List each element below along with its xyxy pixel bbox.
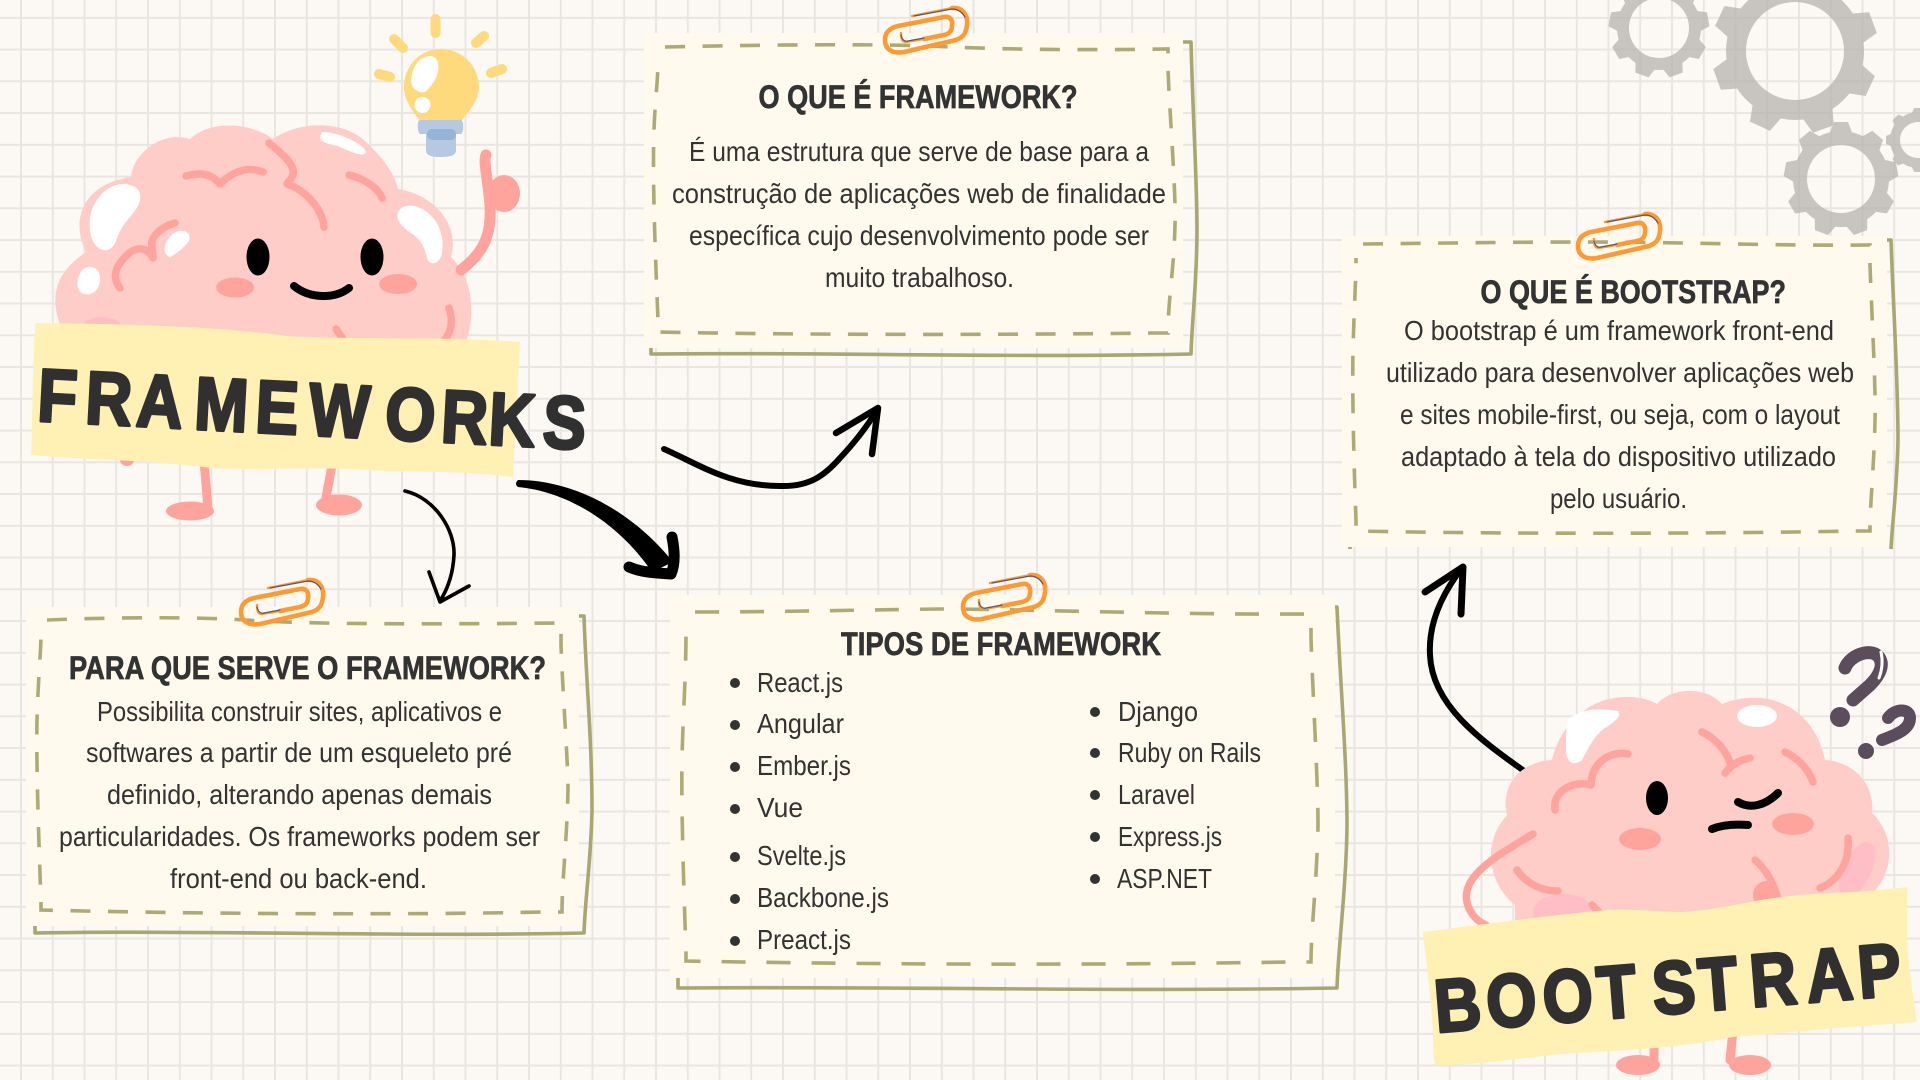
illustration: happy brain xyxy=(55,125,520,520)
text block xyxy=(672,136,1166,293)
list: right column: ASP.NET xyxy=(1117,863,1212,894)
text block: pelo usuário. xyxy=(1550,483,1687,514)
list: left column xyxy=(730,667,889,955)
text block: Possibilita construir sites, aplicativos e xyxy=(97,696,502,727)
list: left column: React.js xyxy=(757,667,843,698)
text block: softwares a partir de um esqueleto pré xyxy=(86,737,512,768)
paperclip xyxy=(1578,214,1660,258)
text block: front-end ou back-end. xyxy=(170,863,427,894)
text block: muito trabalhoso. xyxy=(825,262,1014,293)
list: right column: Django xyxy=(1118,696,1198,727)
arrow: to para que serve xyxy=(405,491,469,602)
panel: para que serve xyxy=(26,580,592,934)
text block: utilizado para desenvolver aplicações web xyxy=(1386,357,1854,388)
list: right column: Laravel xyxy=(1118,779,1195,810)
list: right column: Express.js xyxy=(1118,821,1222,852)
text block xyxy=(1386,315,1854,514)
arrow: to tipos de framework xyxy=(516,480,674,574)
arrow: to o que é framework xyxy=(664,408,878,486)
text block: particularidades. Os frameworks podem ser xyxy=(59,821,540,852)
panel: tipos de framework xyxy=(670,575,1347,989)
paperclip xyxy=(885,8,967,52)
icon: question marks xyxy=(1830,652,1910,759)
paperclip xyxy=(241,580,323,624)
icon: light bulb xyxy=(379,19,502,157)
text block: e sites mobile-first, ou seja, com o layout xyxy=(1400,399,1840,430)
text block: definido, alterando apenas demais xyxy=(107,779,492,810)
heading: O QUE É FRAMEWORK? xyxy=(758,79,1078,115)
list: left column: Preact.js xyxy=(757,924,851,955)
banner: bootstrap xyxy=(1423,887,1917,1065)
panel: o que é bootstrap xyxy=(1342,214,1898,549)
list: right column xyxy=(1090,696,1261,894)
text block: É uma estrutura que serve de base para a xyxy=(689,136,1149,167)
title: frameworks: FRAMEWORKS xyxy=(36,353,588,466)
list: left column: Backbone.js xyxy=(757,882,889,913)
illustration: thinking brain xyxy=(1466,691,1889,1075)
heading: PARA QUE SERVE O FRAMEWORK? xyxy=(69,650,546,686)
title: bootstrap: BOOTSTRAP xyxy=(1431,928,1904,1048)
heading: TIPOS DE FRAMEWORK xyxy=(841,626,1161,662)
text block xyxy=(59,696,540,894)
list: left column: Vue xyxy=(757,792,803,823)
text block: adaptado à tela do dispositivo utilizado xyxy=(1401,441,1836,472)
list: right column: Ruby on Rails xyxy=(1118,737,1261,768)
list: left column: Angular xyxy=(757,708,844,739)
list: left column: Ember.js xyxy=(757,750,851,781)
banner: frameworks xyxy=(31,323,588,477)
panel: o que é framework xyxy=(644,8,1197,355)
heading: O QUE É BOOTSTRAP? xyxy=(1480,274,1786,310)
list: left column: Svelte.js xyxy=(757,840,846,871)
text block: específica cujo desenvolvimento pode ser xyxy=(689,220,1149,251)
paperclip xyxy=(963,575,1045,619)
arrow: to o que é bootstrap xyxy=(1425,567,1527,773)
text block: O bootstrap é um framework front-end xyxy=(1404,315,1834,346)
icon: gears xyxy=(1608,0,1920,237)
text block: construção de aplicações web de finalidade xyxy=(672,178,1166,209)
